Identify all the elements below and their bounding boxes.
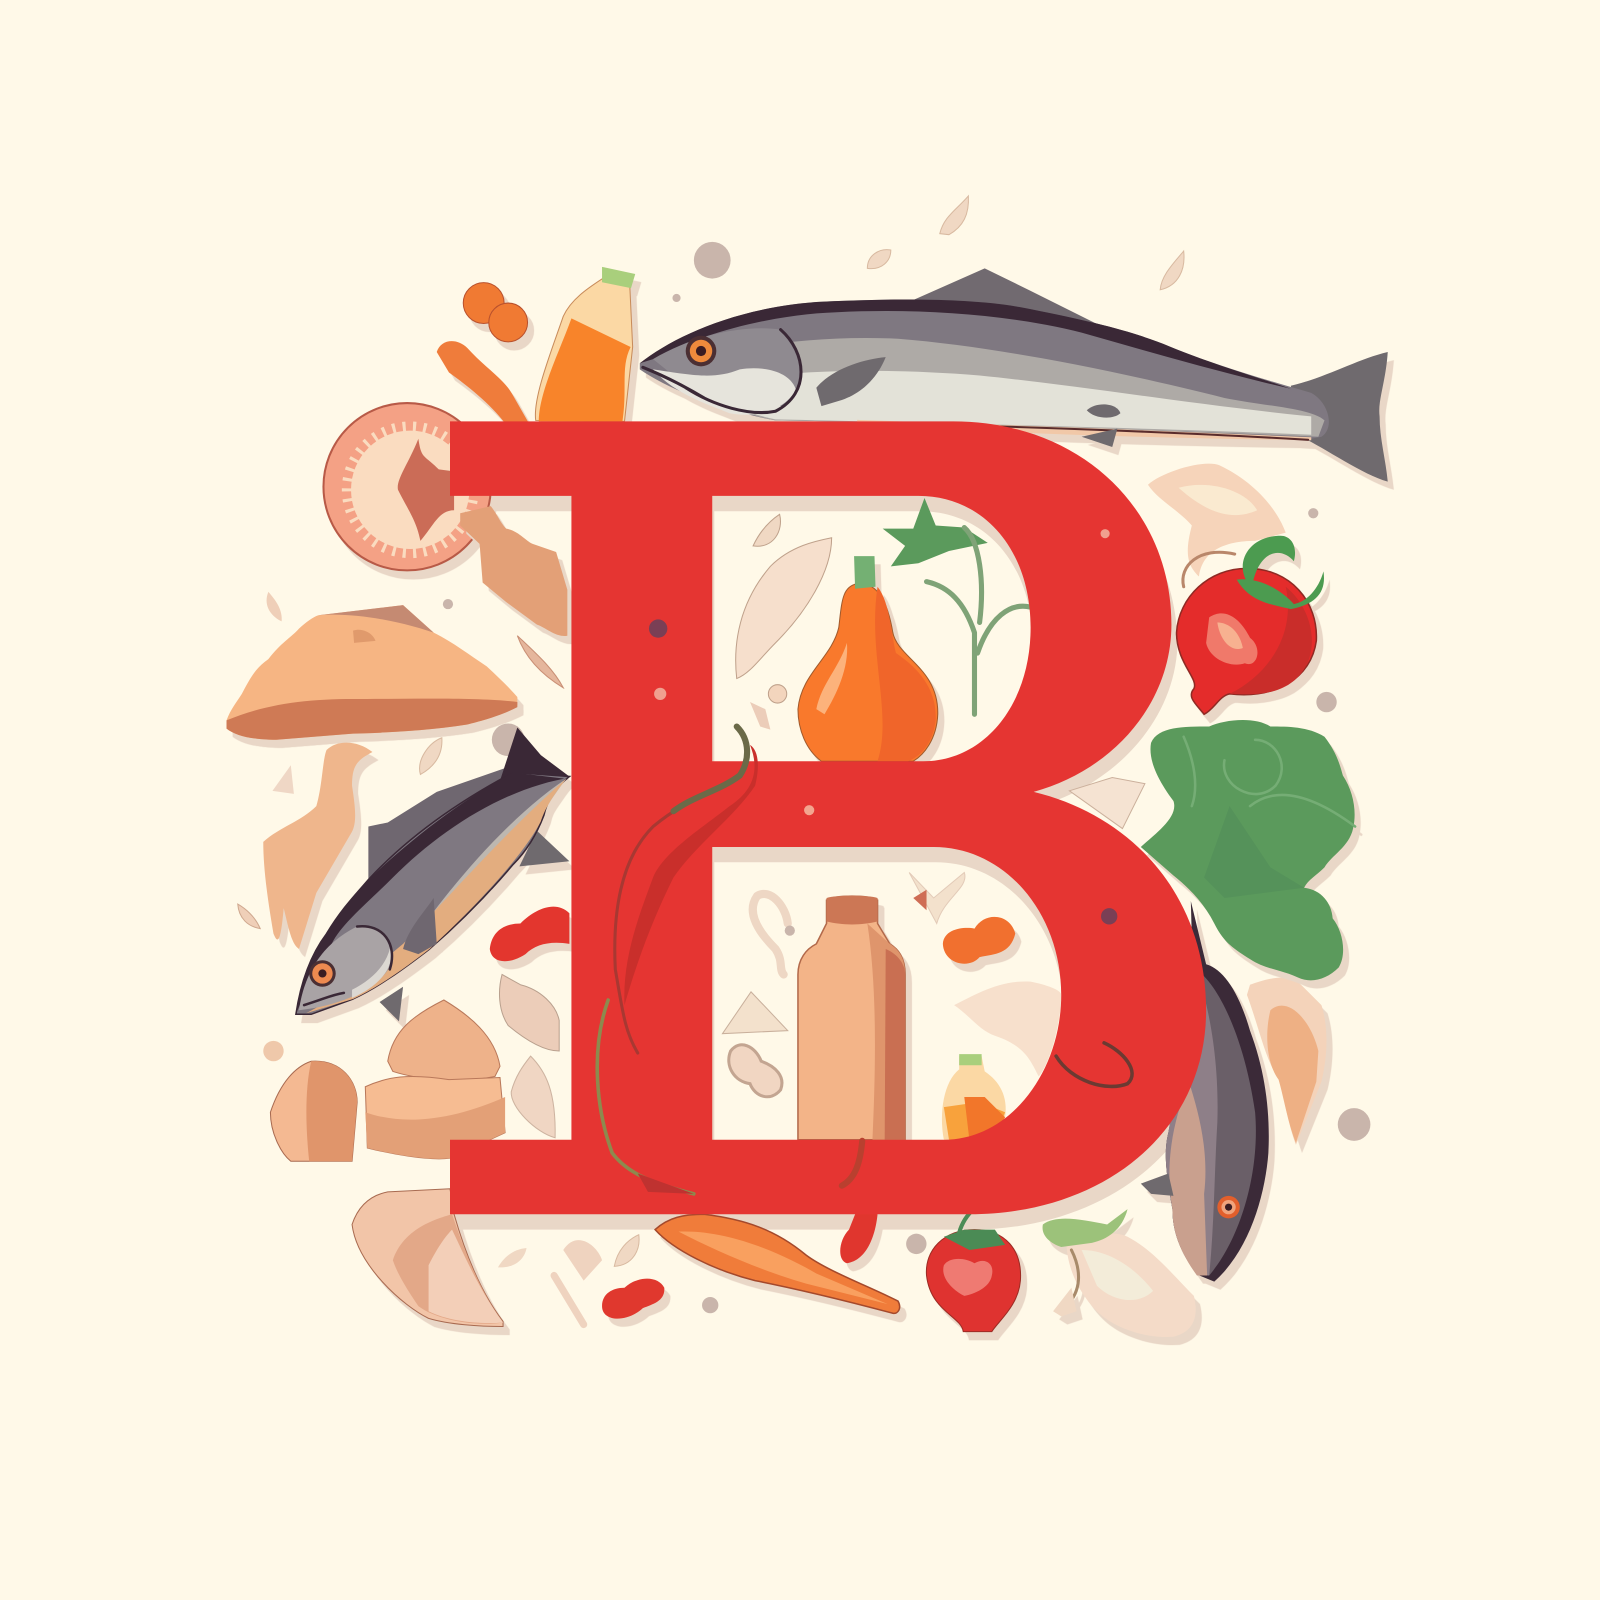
paper triangle [909, 872, 965, 923]
bread loaf [227, 605, 517, 740]
counter items: lower [722, 778, 1145, 1140]
left ginger root [263, 743, 372, 949]
letter B [450, 421, 1206, 1214]
red bean bottom [602, 1279, 664, 1319]
orange double bean [943, 917, 1015, 964]
bun stack [365, 1000, 505, 1159]
pale cabbage bottom right [1043, 1209, 1196, 1337]
red drip below B [840, 1209, 878, 1263]
fish fins [519, 831, 569, 866]
pumpkin [798, 556, 938, 761]
red bean left [490, 907, 569, 961]
swirl [753, 894, 788, 974]
fish eye [309, 960, 336, 987]
pale shell [954, 981, 1061, 1077]
fish body [640, 300, 1329, 440]
fish eye [686, 336, 716, 366]
large tan bottle [798, 896, 905, 1140]
fish tail [500, 728, 569, 786]
chunk: orange double slice [463, 283, 528, 342]
chili stem over stem of B [615, 727, 747, 1053]
orange juice bottle top [535, 269, 633, 421]
dorsal fin [913, 268, 1102, 329]
small juice bottle [942, 1054, 1006, 1140]
counter items: upper [736, 498, 1031, 761]
lower vine [597, 1000, 694, 1194]
fish eye [1217, 1196, 1240, 1218]
ginger chunk upper left [460, 506, 567, 636]
tiny shell [750, 685, 787, 730]
mushroom piece left [270, 1061, 357, 1161]
red tomato right [1177, 536, 1324, 714]
green star leaf and plant [883, 498, 1031, 714]
fish body [296, 772, 569, 1014]
right vertical fish [1141, 901, 1269, 1282]
small tomato bottom [926, 1194, 1021, 1332]
carrot bottom [655, 1214, 900, 1313]
decorative dots and seeds [238, 196, 1370, 1324]
fish tail [1291, 352, 1388, 482]
pale leaf chunk [736, 538, 832, 679]
pyramid [722, 992, 788, 1034]
peach cross-section [323, 403, 491, 570]
curl right [1056, 1043, 1132, 1086]
left tuna fish [296, 728, 569, 1021]
pale petals left [499, 974, 559, 1138]
pale lump upper right [1148, 464, 1286, 587]
small drip [842, 1141, 862, 1186]
peanut [729, 1045, 782, 1097]
overlay: chili vines and dots on B [597, 529, 1132, 1194]
carrot stick top [437, 341, 530, 424]
shell chunk lower left [352, 1189, 503, 1327]
right lower peach root [1247, 977, 1326, 1145]
letter B shadow [452, 437, 1214, 1230]
top salmon fish [640, 268, 1388, 482]
fish body [1166, 901, 1269, 1282]
small seed [753, 514, 780, 546]
dots on B [649, 619, 667, 638]
lettuce leaf [1141, 720, 1355, 980]
broken triangle right of waist [1069, 778, 1145, 829]
